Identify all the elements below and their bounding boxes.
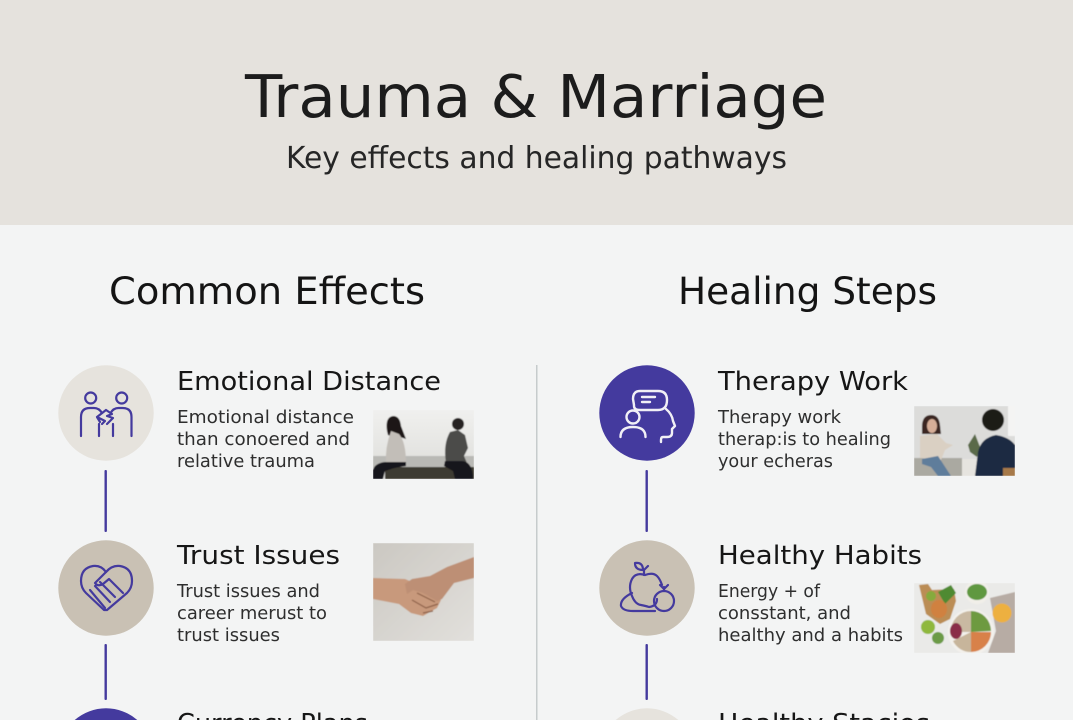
photo: therapy session (914, 406, 1015, 476)
photo: handshake (373, 543, 474, 641)
item description: Energy + of (718, 582, 821, 602)
item description: healthy and a habits (718, 626, 903, 646)
item description: relative trauma (177, 452, 315, 472)
photo: healthy food (914, 580, 1015, 655)
item: healthy stacios (616, 708, 930, 720)
item description: Emotional distance (177, 408, 354, 428)
item: trust issues (58, 540, 474, 646)
photo: couple sitting apart (373, 410, 474, 479)
item description (718, 582, 903, 646)
item: currency plans (75, 708, 368, 720)
item description: career merust to (177, 604, 327, 624)
item description: Therapy work (717, 408, 842, 428)
title: Trauma & Marriage (244, 62, 827, 131)
icon circle (616, 708, 678, 720)
item description: therap:is to healing (718, 430, 891, 450)
icon circle (75, 708, 137, 720)
icon: two people with broken heart (58, 365, 154, 461)
item description (176, 584, 326, 642)
item description: than conoered and (177, 430, 350, 450)
item description (717, 408, 891, 472)
icon: heart handshake (58, 540, 154, 636)
connector line 1 (104, 470, 107, 532)
item: therapy work (599, 365, 1015, 476)
item description: Trust issues and (176, 582, 320, 602)
item: healthy habits (599, 540, 1015, 655)
connector line 1 (646, 470, 648, 532)
header band (0, 0, 1073, 225)
connector line 2 (104, 644, 107, 700)
panel: common effects (58, 365, 474, 720)
item description: trust issues (177, 626, 280, 646)
item description: your echeras (718, 452, 833, 472)
item: emotional distance (58, 365, 474, 479)
item title: Healthy Habits (718, 541, 922, 571)
panel: healing steps (599, 365, 1015, 720)
item description: consstant, and (718, 604, 851, 624)
heading: healing steps: Healing Steps (678, 270, 937, 313)
item title: Therapy Work (717, 367, 908, 397)
item title: Trust Issues (176, 541, 340, 571)
column divider (536, 365, 538, 720)
heading: common effects: Common Effects (109, 270, 425, 313)
connector line 2 (646, 644, 648, 700)
subtitle: Key effects and healing pathways (286, 141, 787, 176)
icon: person and head with speech bubble (599, 365, 695, 461)
icon: apples (599, 540, 695, 636)
item title: Emotional Distance (177, 367, 441, 397)
item description (178, 410, 353, 468)
